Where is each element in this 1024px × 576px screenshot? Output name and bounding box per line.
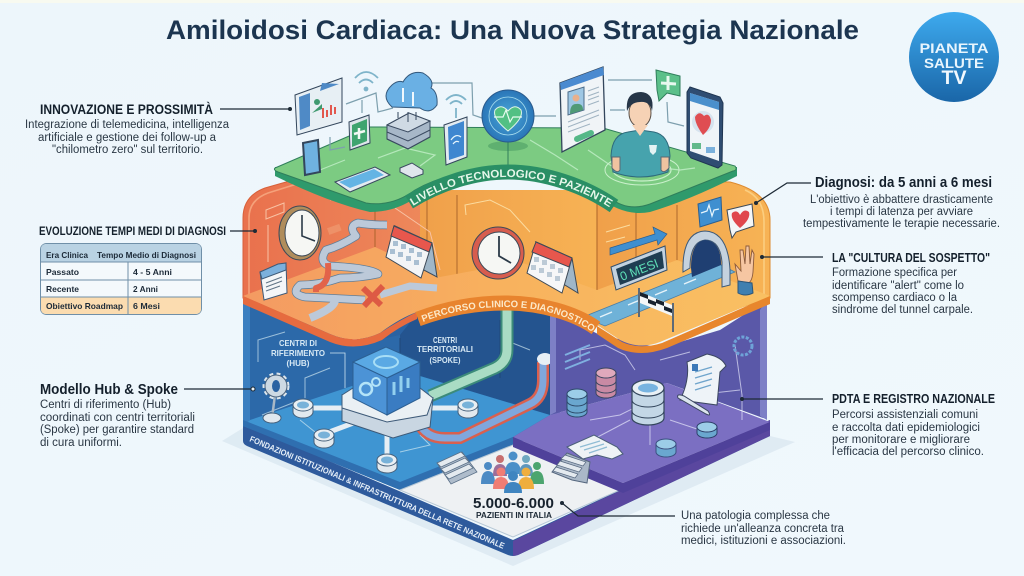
text block: alleanza — [681, 510, 846, 547]
icon: data links — [330, 80, 684, 150]
panel: orange diagnosis walls — [243, 178, 770, 353]
text block: pdta e registro: per monitorare e migliorare — [832, 434, 970, 446]
title: Amiloidosi Cardiaca: Una Nuova Strategia Nazionale — [166, 15, 859, 45]
text block: alleanza: medici, istituzioni e associazioni. — [681, 535, 846, 547]
icon: folder — [260, 263, 287, 300]
icon: patient — [611, 92, 670, 177]
text block: pdta e registro: Percorsi assistenziali comuni — [832, 409, 978, 421]
arrow: cultura leader — [760, 255, 823, 259]
icon: heart phone — [687, 87, 723, 168]
icon: small medical tablet — [349, 115, 370, 150]
patients stat — [473, 495, 554, 520]
text block: pdta e registro — [832, 391, 995, 458]
text block: diagnosi — [803, 175, 1000, 230]
table: tempi medi di diagnosi: 6 Mesi — [133, 301, 160, 311]
icon: flat tablet — [335, 167, 390, 192]
hub label: (HUB) — [286, 359, 310, 368]
icon: center clock — [472, 227, 524, 279]
spoke label: CENTRI — [433, 336, 457, 345]
icon: phone left — [303, 140, 320, 175]
icon: small device — [400, 163, 423, 178]
icon: 0 mesi display — [611, 246, 667, 290]
arrow: pazienti leader — [560, 501, 675, 516]
icon: monitor — [295, 78, 342, 135]
hub: spokes and nodes — [293, 399, 478, 473]
icon: globe heart — [482, 90, 534, 142]
icon: blue database left — [567, 389, 587, 417]
icon: hub hexagon and cube — [342, 347, 433, 438]
text block: modello hub and spoke: di cura uniformi. — [40, 437, 122, 449]
text block: diagnosi: tempestivamente le terapie necessarie. — [803, 218, 1000, 230]
table: tempi medi di diagnosi: Recente — [46, 284, 79, 294]
table: tempi medi di diagnosi: 2 Anni — [133, 284, 158, 294]
icon: green pipe — [430, 300, 507, 396]
icon: left stairs — [437, 452, 477, 484]
icon: 0 mesi display: 0 MESI — [618, 256, 660, 284]
hub label: CENTRI DI — [279, 339, 317, 348]
icon: register scroll — [678, 354, 726, 415]
text block: diagnosi: L'obiettivo è abbattere drasticamente — [810, 194, 993, 206]
logo: Pianeta Salute TV: PIANETA — [920, 40, 988, 56]
icon: medical bubble — [656, 70, 680, 101]
table: tempi medi di diagnosi: Obiettivo Roadmap — [46, 301, 123, 311]
text block: modello hub and spoke: (Spoke) per garantire standard — [40, 424, 194, 436]
text block: innovazione e prossimita — [25, 102, 230, 156]
icon: tablet with wifi — [444, 117, 467, 165]
logo: Pianeta Salute TV: SALUTE — [924, 55, 984, 71]
table: tempi medi di diagnosi: 4 - 5 Anni — [133, 267, 172, 277]
text block: cultura del sospetto: LA "CULTURA DEL SOSPETTO" — [832, 251, 990, 265]
icon: patients group — [481, 452, 544, 493]
ground shadow — [222, 428, 795, 566]
icon: road through tunnel — [583, 263, 735, 326]
patients stat: 5.000-6.000 — [473, 495, 554, 512]
icon: wifi signal centre — [446, 95, 466, 118]
icon: blue arrow — [610, 227, 667, 255]
table: tempi medi di diagnosi: Tempo Medio di Diagnosi — [97, 250, 196, 260]
icon: blue database front — [656, 439, 676, 457]
text block: pdta e registro: l'efficacia del percorso clinico. — [832, 446, 984, 458]
icon: central database — [632, 380, 664, 425]
text block: cultura del sospetto: scompenso cardiaco o la — [832, 292, 958, 304]
hub label: RIFERIMENTO — [271, 349, 326, 358]
text block: pdta e registro: e raccolta dati epidemiologici — [832, 422, 980, 434]
icon: wifi signal left — [355, 72, 378, 90]
arrow: hub leader — [184, 387, 255, 391]
text block: cultura del sospetto: Formazione specifica per — [832, 267, 957, 279]
text block: modello hub and spoke: coordinati con centri territoriali — [40, 412, 195, 424]
table: tempi medi di diagnosi — [40, 244, 202, 314]
foundation label: FONDAZIONI ISTITUZIONALI & INFRASTRUTTURA DELLA RETE NAZIONALE — [248, 434, 507, 551]
heading ribbon: percorso clinico: PERCORSO CLINICO E DIAGNOSTICO — [421, 300, 594, 331]
logo: Pianeta Salute TV: TV — [942, 68, 967, 89]
spoke label: TERRITORIALI — [417, 345, 473, 354]
arrow: evoluzione leader — [230, 229, 257, 233]
text block: modello hub and spoke: Modello Hub & Spoke — [40, 381, 178, 398]
heading ribbon: livello tecnologico: LIVELLO TECNOLOGICO E PAZIENTE — [410, 169, 613, 208]
icon: raised hand — [735, 246, 754, 295]
hub label — [271, 339, 326, 368]
icon: left clock — [279, 206, 321, 260]
text block: innovazione e prossimita: "chilometro zero" sul territorio. — [52, 144, 203, 156]
arrow: pdta leader — [740, 397, 823, 401]
panel: blue hub and spoke level — [243, 290, 560, 490]
text block: evoluzione heading: EVOLUZIONE TEMPI MEDI DI DIAGNOSI — [39, 226, 226, 238]
table: tempi medi di diagnosi: Era Clinica — [46, 250, 88, 260]
icon: right calendar — [527, 242, 578, 293]
icon: finish line flag — [639, 288, 673, 332]
icon: gear — [263, 375, 287, 423]
icon: heart bubble — [727, 204, 754, 238]
panel: diagnosis floor — [243, 247, 770, 353]
icon: cloud — [386, 72, 437, 122]
text block: diagnosi: i tempi di latenza per avviare — [830, 206, 973, 218]
icon: red cross — [363, 286, 383, 306]
spoke label: (SPOKE) — [430, 356, 461, 365]
patients stat: PAZIENTI IN ITALIA — [476, 511, 552, 520]
text block: innovazione e prossimita: artificiale e gestione dei follow-up a — [38, 132, 217, 144]
icon: blue database right — [697, 422, 717, 438]
icon: tunnel — [683, 231, 730, 287]
text block: cultura del sospetto: identificare "alert" come lo — [832, 280, 964, 292]
panel: purple registry level — [513, 300, 770, 493]
text block: alleanza: Una patologia complessa che — [681, 510, 830, 522]
panel: patients base — [400, 445, 620, 537]
text block: modello hub and spoke — [40, 381, 195, 449]
text block: modello hub and spoke: Centri di riferimento (Hub) — [40, 399, 171, 411]
panel: foundations base — [243, 420, 770, 556]
isometric building illustration — [222, 66, 794, 566]
text block: diagnosi: Diagnosi: da 5 anni a 6 mesi — [815, 175, 992, 191]
icon: red and blue pipe — [418, 362, 543, 438]
spoke label — [417, 336, 473, 365]
arrow: innovazione leader — [220, 107, 292, 111]
arrow: diagnosi leader — [754, 183, 811, 205]
text block: innovazione e prossimita: INNOVAZIONE E PROSSIMITÀ — [40, 102, 213, 117]
icon: profile tablet — [560, 67, 605, 152]
text block: cultura del sospetto — [832, 251, 990, 316]
text block: alleanza: richiede un'alleanza concreta tra — [681, 523, 845, 535]
logo: Pianeta Salute TV — [909, 12, 999, 102]
icon: pink database — [596, 368, 616, 398]
table: tempi medi di diagnosi: Passato — [46, 267, 79, 277]
icon: winding road — [296, 223, 437, 318]
icon: server stack — [387, 113, 430, 149]
text block: innovazione e prossimita: Integrazione di telemedicina, intelligenza — [25, 119, 230, 131]
text block: cultura del sospetto: sindrome del tunnel carpale. — [832, 304, 973, 316]
panel: green technology level — [274, 67, 737, 213]
icon: left calendar — [386, 226, 437, 278]
icon: document on stairs — [552, 435, 623, 483]
icon: ecg tile — [698, 197, 722, 227]
text block: pdta e registro: PDTA E REGISTRO NAZIONALE — [832, 391, 995, 406]
